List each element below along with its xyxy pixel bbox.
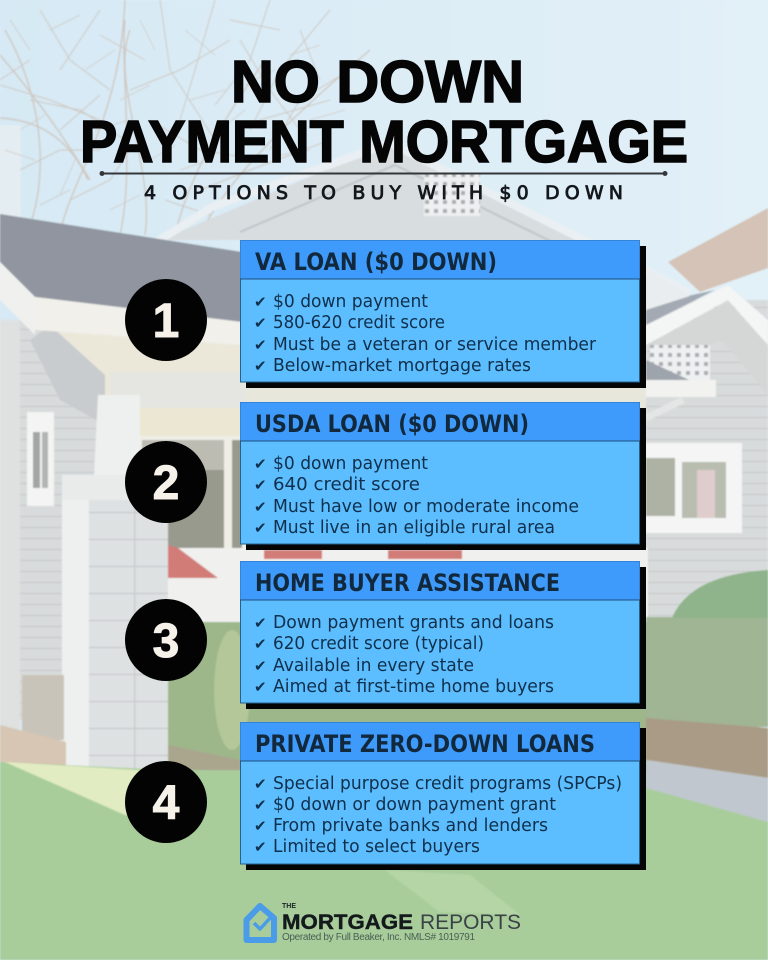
checklist: ✔: [254, 519, 267, 537]
checklist: Available in every state: [273, 655, 474, 676]
checklist: Down payment grants and loans: [273, 612, 554, 633]
number badge 3: [125, 599, 207, 681]
checklist: [254, 612, 554, 697]
checklist: ✔: [254, 657, 267, 675]
checklist: Below-market mortgage rates: [273, 355, 531, 376]
title: [80, 49, 688, 175]
checklist: $0 down payment: [273, 291, 428, 312]
checklist: Aimed at first-time home buyers: [273, 676, 554, 697]
panel: home buyer assistance: [240, 562, 646, 709]
right vent: [650, 345, 710, 385]
checklist: [254, 453, 579, 538]
gable: [160, 143, 690, 400]
bushes: [168, 622, 648, 772]
porch details: [168, 548, 648, 623]
title line 2: PAYMENT MORTGAGE: [80, 109, 688, 175]
number badge 4: 4: [153, 777, 180, 830]
panel heading: VA LOAN ($0 DOWN): [255, 248, 497, 276]
checklist: 640 credit score: [273, 474, 420, 495]
number badge 4: [125, 761, 207, 843]
checklist: ✔: [254, 498, 267, 516]
checklist: ✔: [254, 775, 267, 793]
checklist: Limited to select buyers: [273, 836, 480, 857]
checklist: ✔: [254, 476, 267, 494]
number badge 2: 2: [153, 457, 179, 510]
checklist: ✔: [254, 455, 267, 473]
checklist: ✔: [254, 817, 267, 835]
logo wordmark: THE: [282, 903, 296, 910]
right roof: [668, 208, 768, 292]
tree branches: [0, 0, 370, 235]
checklist: [254, 773, 622, 857]
checklist: Must have low or moderate income: [273, 496, 579, 517]
checklist: Special purpose credit programs (SPCPs): [273, 773, 622, 794]
panel: private zero-down loans: [240, 722, 646, 870]
checklist: ✔: [254, 796, 267, 814]
panel heading: USDA LOAN ($0 DOWN): [255, 410, 529, 438]
title line 1: NO DOWN: [231, 49, 524, 115]
panel heading: HOME BUYER ASSISTANCE: [255, 569, 560, 597]
title divider: [100, 171, 668, 176]
panel: USDA loan: [240, 402, 646, 550]
house walls: [240, 320, 650, 620]
logo wordmark: MORTGAGE: [282, 911, 413, 934]
checklist: ✔: [254, 314, 267, 332]
checklist: 620 credit score (typical): [273, 633, 484, 654]
checklist: ✔: [254, 293, 267, 311]
number badge 3: 3: [153, 615, 179, 668]
ground: [0, 725, 66, 768]
checklist: $0 down payment: [273, 453, 428, 474]
checklist: ✔: [254, 635, 267, 653]
logo wordmark: Operated by Full Beaker, Inc. NMLS# 1019791: [282, 932, 475, 943]
checklist: From private banks and lenders: [273, 815, 548, 836]
checklist: ✔: [254, 838, 267, 856]
number badge 1: [125, 279, 207, 361]
checklist: ✔: [254, 336, 267, 354]
windows: [27, 412, 54, 506]
checklist: Must be a veteran or service member: [273, 334, 597, 355]
checklist: Must live in an eligible rural area: [273, 517, 555, 538]
checklist: ✔: [254, 678, 267, 696]
logo: The Mortgage Reports: [246, 903, 521, 943]
subtitle: 4 OPTIONS TO BUY WITH $0 DOWN: [144, 182, 623, 204]
logo wordmark: REPORTS: [420, 911, 521, 934]
left roof: [0, 214, 242, 322]
number badge 2: [125, 441, 207, 523]
checklist: ✔: [254, 614, 267, 632]
porch column: [94, 395, 140, 475]
panel heading: PRIVATE ZERO-DOWN LOANS: [255, 730, 595, 758]
logo wordmark: [282, 903, 521, 943]
checklist: $0 down or down payment grant: [273, 794, 556, 815]
panel: VA loan: [240, 240, 646, 388]
checklist: [254, 291, 597, 376]
checklist: 580-620 credit score: [273, 312, 445, 333]
icon: house with check: [246, 906, 274, 940]
number badge 1: 1: [153, 295, 179, 348]
checklist: ✔: [254, 357, 267, 375]
